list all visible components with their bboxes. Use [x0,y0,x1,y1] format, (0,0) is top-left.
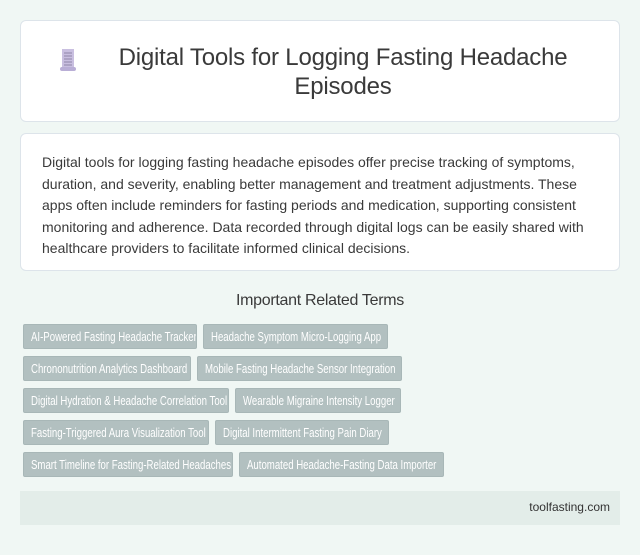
tag: Wearable Migraine Intensity Logger [243,394,395,408]
tag [23,324,197,349]
tag [235,388,401,413]
tag [203,324,388,349]
tag: Chrononutrition Analytics Dashboard [31,362,187,376]
tag: Smart Timeline for Fasting-Related Headaches [31,458,231,472]
tag: Fasting-Triggered Aura Visualization Tool [31,426,206,440]
tag: AI-Powered Fasting Headache Tracker [31,330,197,344]
title: Digital Tools for Logging Fasting Headache Episodes [119,44,567,100]
footer [20,491,620,525]
section heading: Important Related Terms [236,292,404,309]
description text: Digital tools for logging fasting headache episodes offer precise tracking of symptoms, duration, and severity, enabling better management and treatment adjustments. These apps often include reminders for fasting periods and medication, supporting consistent monitoring and adherence. Data recorded through digital logs can be easily shared with healthcare providers to facilitate informed clinical decisions. [42,154,584,256]
header panel [20,20,620,122]
tag [197,356,402,381]
tag [23,452,233,477]
description panel [20,133,620,271]
tag [215,420,389,445]
tag [23,356,191,381]
tag: Digital Hydration & Headache Correlation Tool [31,394,227,408]
tag: Headache Symptom Micro-Logging App [211,330,381,344]
tag: Mobile Fasting Headache Sensor Integration [205,362,395,376]
tag [23,420,209,445]
icon: document [60,49,76,71]
footer text: toolfasting.com [529,500,610,514]
tag: Automated Headache-Fasting Data Importer [247,458,436,472]
tag [23,388,229,413]
tag: Digital Intermittent Fasting Pain Diary [223,426,382,440]
tag [239,452,444,477]
